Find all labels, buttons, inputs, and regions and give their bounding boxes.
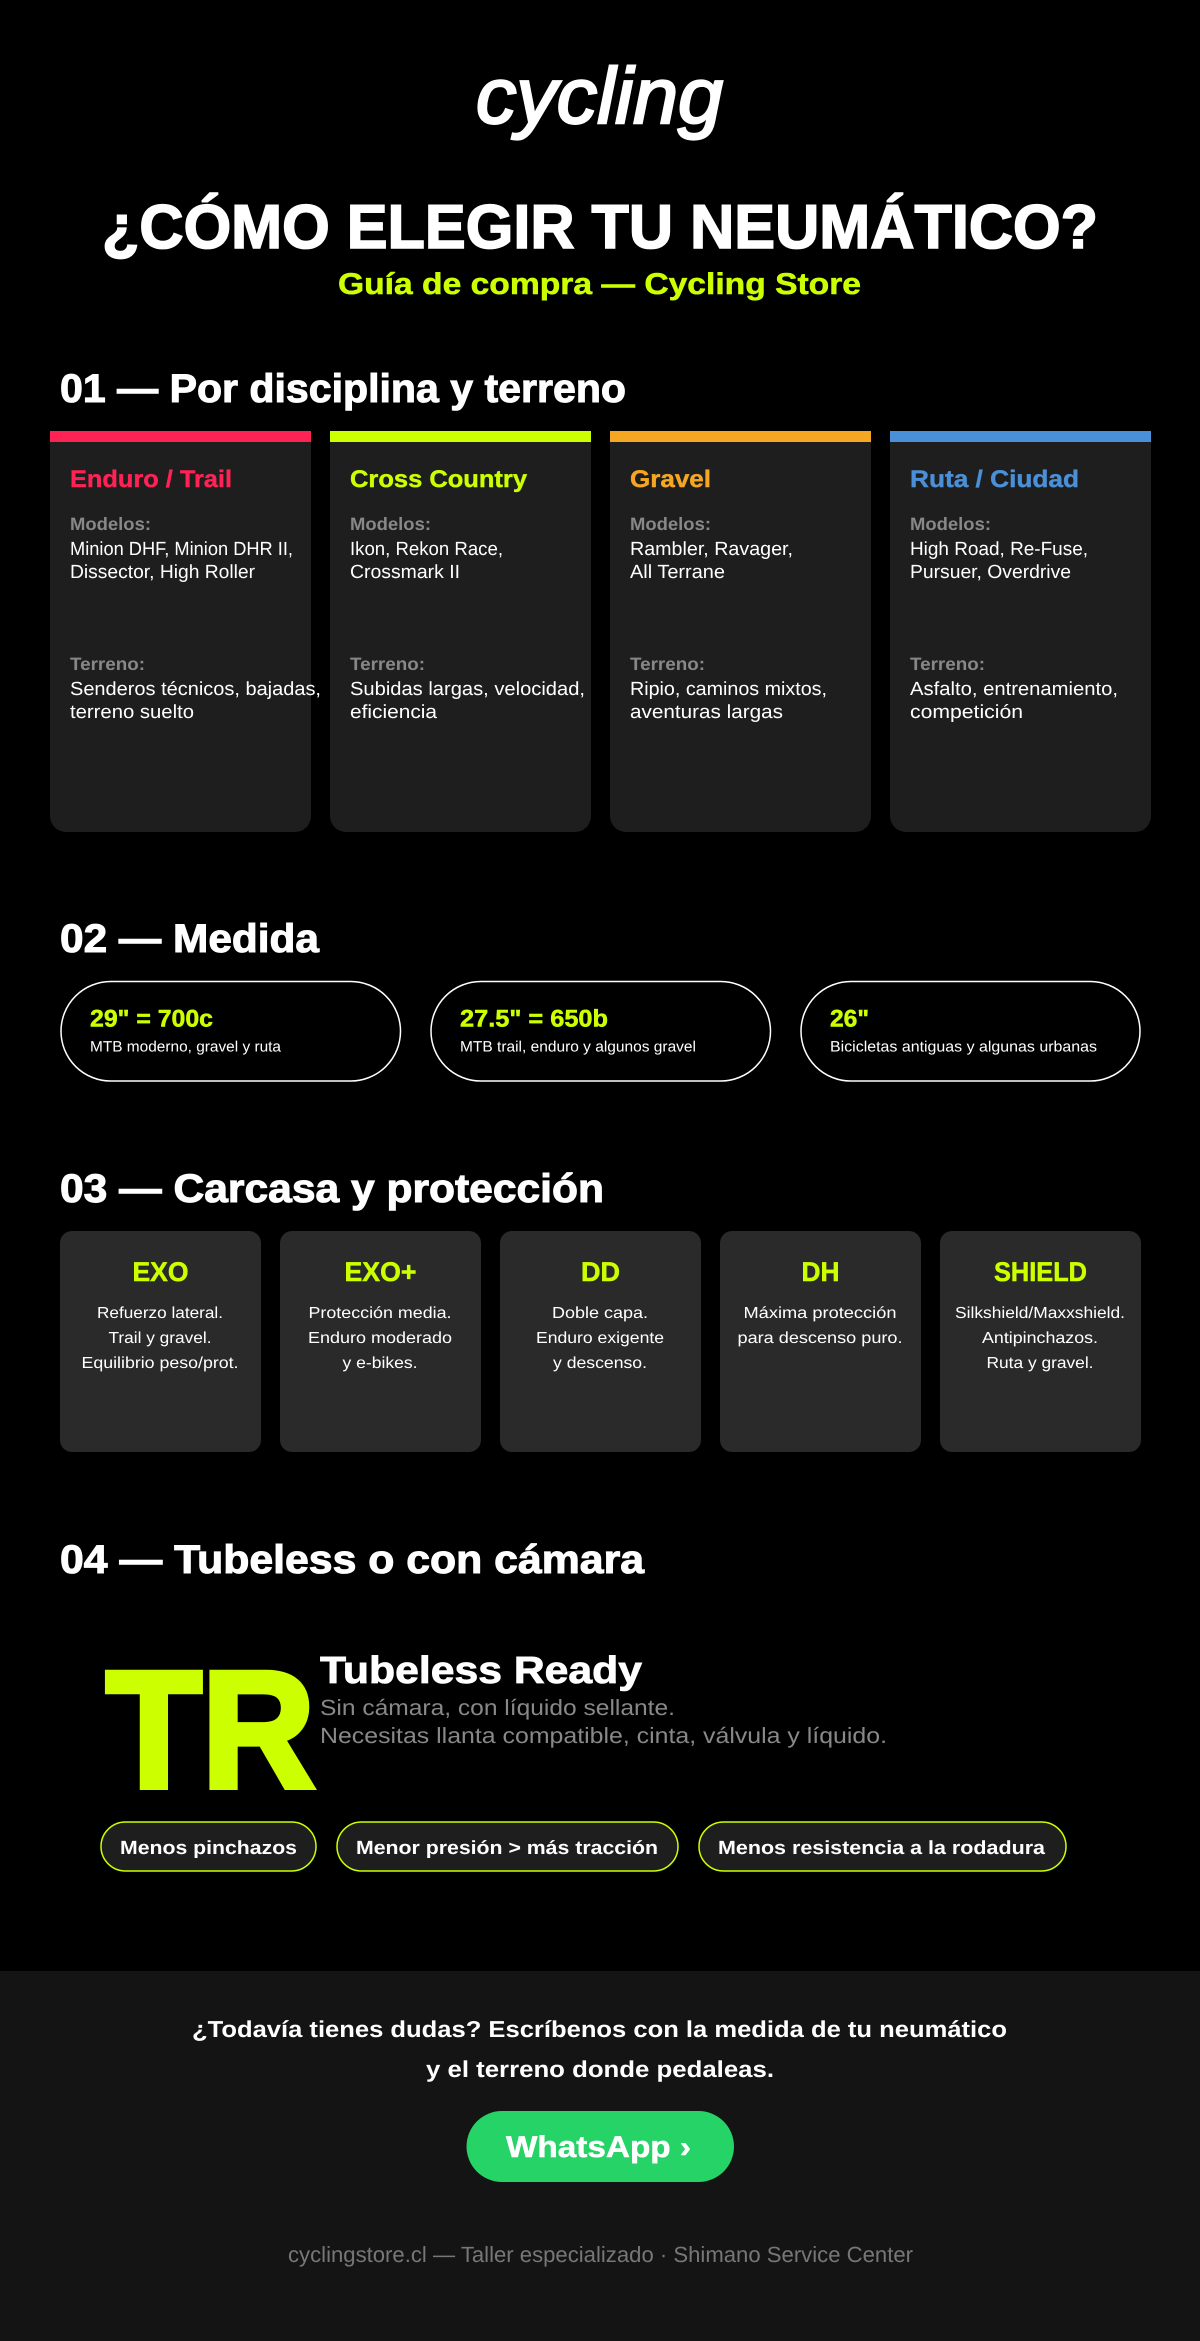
footer panel <box>0 1971 1200 2341</box>
panel: Enduro / Trail <box>50 431 321 832</box>
panel: Cross Country: Subidas largas, velocidad, <box>350 679 585 700</box>
casing card: SHIELD: Silkshield/Maxxshield. <box>955 1305 1125 1322</box>
benefit chip: presión: Menor presión > más tracción <box>356 1838 658 1859</box>
tubeless ready text: Tubeless Ready <box>320 1650 642 1692</box>
panel: Enduro / Trail: Senderos técnicos, bajadas, <box>70 679 321 700</box>
benefit chip: pinchazos <box>101 1822 316 1871</box>
panel: Gravel: All Terrane <box>630 562 725 583</box>
panel: Enduro / Trail: Modelos: <box>70 514 151 534</box>
footer credit: cyclingstore.cl — Taller especializado · Shimano Service Center <box>288 2242 913 2267</box>
casing card: DH <box>720 1231 921 1452</box>
section heading 01: 01 — Por disciplina y terreno <box>60 367 626 411</box>
casing card: DD: DD <box>581 1257 620 1287</box>
casing card: SHIELD: Antipinchazos. <box>982 1330 1098 1347</box>
casing card: EXO+: y e-bikes. <box>342 1355 418 1372</box>
casing card: SHIELD: Ruta y gravel. <box>986 1355 1094 1372</box>
panel: Gravel: Ripio, caminos mixtos, <box>630 679 827 700</box>
panel: Ruta / Ciudad: Modelos: <box>910 514 991 534</box>
tubeless ready text: Sin cámara, con líquido sellante. <box>320 1695 675 1720</box>
section heading 02: 02 — Medida <box>60 917 320 961</box>
panel: Ruta / Ciudad: competición <box>910 702 1023 723</box>
panel: Gravel: Rambler, Ravager, <box>630 539 793 560</box>
panel: Cross Country: Ikon, Rekon Race, <box>350 539 503 560</box>
casing card: EXO: Equilibrio peso/prot. <box>82 1355 238 1372</box>
section heading 03: 03 — Carcasa y protección <box>60 1167 604 1211</box>
casing card: EXO+: Protección media. <box>308 1305 452 1322</box>
panel: Cross Country: Crossmark II <box>350 562 460 583</box>
panel: Enduro / Trail: Dissector, High Roller <box>70 562 256 583</box>
panel: Cross Country <box>330 431 591 832</box>
benefit chip: pinchazos: Menos pinchazos <box>120 1838 297 1859</box>
size pill: 27.5 <box>431 982 770 1081</box>
size pill: 26 <box>801 982 1140 1081</box>
casing card: EXO+: Enduro moderado <box>308 1330 452 1347</box>
panel: Gravel: Terreno: <box>630 654 705 674</box>
panel: Ruta / Ciudad: Pursuer, Overdrive <box>910 562 1071 583</box>
casing card: DD: Enduro exigente <box>536 1330 664 1347</box>
panel: Enduro / Trail: Minion DHF, Minion DHR II, <box>70 539 293 560</box>
panel: Enduro / Trail: Enduro / Trail <box>70 466 232 493</box>
casing card: EXO: EXO <box>132 1257 188 1287</box>
logo: cycling: cycling <box>476 51 723 140</box>
casing card: EXO+: EXO+ <box>344 1257 416 1287</box>
benefit chip: rodadura <box>699 1822 1066 1871</box>
title: ¿CÓMO ELEGIR TU NEUMÁTICO? <box>102 193 1098 262</box>
casing card: EXO+ <box>280 1231 481 1452</box>
panel: Ruta / Ciudad: Asfalto, entrenamiento, <box>910 679 1118 700</box>
panel: Gravel: aventuras largas <box>630 702 783 723</box>
casing card: DD <box>500 1231 701 1452</box>
casing card: DD: Doble capa. <box>552 1305 648 1322</box>
casing card: DH: para descenso puro. <box>738 1330 902 1347</box>
WhatsApp button <box>466 2111 734 2182</box>
size pill: 26: 26" <box>830 1006 869 1032</box>
casing card: DH: DH <box>802 1257 840 1287</box>
panel: Ruta / Ciudad: High Road, Re-Fuse, <box>910 539 1088 560</box>
panel: Gravel: Modelos: <box>630 514 711 534</box>
casing card: EXO <box>60 1231 261 1452</box>
panel: Cross Country: Cross Country <box>350 466 528 493</box>
panel: Ruta / Ciudad <box>890 431 1151 832</box>
call to action text: ¿Todavía tienes dudas? Escríbenos con la medida de tu neumático <box>192 2016 1007 2042</box>
panel: Enduro / Trail: Terreno: <box>70 654 145 674</box>
casing card: EXO: Trail y gravel. <box>108 1330 212 1347</box>
casing card: SHIELD: SHIELD <box>994 1257 1087 1287</box>
tubeless ready text <box>320 1650 887 1748</box>
panel: Cross Country: eficiencia <box>350 702 437 723</box>
panel: Gravel <box>610 431 871 832</box>
tubeless ready text: Necesitas llanta compatible, cinta, válvula y líquido. <box>320 1723 887 1748</box>
subtitle: Guía de compra — Cycling Store <box>338 268 861 301</box>
panel: Ruta / Ciudad: Terreno: <box>910 654 985 674</box>
size pill: 27.5: 27.5" = 650b <box>460 1006 608 1032</box>
panel: Gravel: Gravel <box>630 466 711 493</box>
section heading 04: 04 — Tubeless o con cámara <box>60 1538 645 1582</box>
benefit chip: presión <box>337 1822 678 1871</box>
size pill: 29: 29" = 700c <box>90 1006 213 1032</box>
size pill: 29 <box>61 982 400 1081</box>
panel: Cross Country: Terreno: <box>350 654 425 674</box>
size pill: 26: Bicicletas antiguas y algunas urbanas <box>830 1038 1097 1056</box>
WhatsApp button: WhatsApp › <box>506 2131 691 2164</box>
casing card: DH: Máxima protección <box>744 1305 896 1322</box>
panel: Ruta / Ciudad: Ruta / Ciudad <box>910 466 1079 493</box>
casing card: EXO: Refuerzo lateral. <box>97 1305 223 1322</box>
casing card: DD: y descenso. <box>553 1355 647 1372</box>
panel: Enduro / Trail: terreno suelto <box>70 702 194 723</box>
panel: Cross Country: Modelos: <box>350 514 431 534</box>
size pill: 29: MTB moderno, gravel y ruta <box>90 1038 282 1056</box>
benefit chip: rodadura: Menos resistencia a la rodadura <box>718 1838 1045 1859</box>
big TR mark: TR <box>106 1638 315 1823</box>
call to action text <box>192 2016 1007 2082</box>
casing card: SHIELD <box>940 1231 1141 1452</box>
size pill: 27.5: MTB trail, enduro y algunos gravel <box>460 1038 696 1056</box>
call to action text: y el terreno donde pedaleas. <box>426 2056 774 2082</box>
